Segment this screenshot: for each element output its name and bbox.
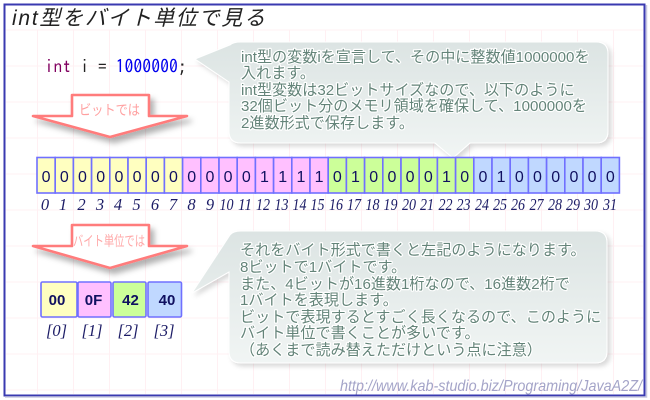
code line: int i = 1000000; [44, 58, 187, 76]
bit index numbers: 18 [366, 195, 380, 214]
bit index numbers: 14 [292, 195, 306, 214]
byte 2 bits [328, 158, 474, 193]
byte cells: 40 [159, 292, 175, 309]
byte cells: 0F [85, 292, 102, 309]
bit index numbers: 19 [384, 195, 398, 214]
bit index numbers: 30 [583, 195, 599, 214]
byte 3 bits: 0 [515, 169, 524, 186]
bit index numbers: 2 [77, 195, 86, 214]
bit index numbers: 9 [206, 195, 214, 214]
byte 1 bits: 0 [224, 169, 233, 186]
byte 2 bits: 0 [387, 169, 396, 186]
bit index numbers: 10 [220, 195, 234, 214]
bit index numbers [41, 195, 617, 214]
byte 0 bits [37, 158, 183, 193]
byte index labels: [0] [46, 321, 67, 340]
byte index labels: [3] [153, 321, 175, 340]
callout: declaration: 2進数形式で保存します。 [241, 115, 414, 132]
callout: declaration: 32個ビット分のメモリ領域を確保して、1000000を [241, 98, 587, 115]
byte 0 bits: 0 [133, 169, 142, 186]
byte 1 bits: 1 [278, 169, 287, 186]
callout: byte explanation: バイト単位で書くことが多いです。 [240, 324, 480, 342]
byte 3 bits: 0 [551, 169, 560, 186]
title: int型をバイト単位で見る [12, 7, 265, 30]
bit index numbers: 17 [347, 195, 362, 214]
callout: byte explanation: 8ビットで1バイトです。 [240, 259, 406, 276]
callout: byte explanation: （あくまで読み替えただけという点に注意） [240, 342, 542, 359]
byte 3 bits [474, 158, 619, 193]
bit index numbers: 16 [329, 195, 344, 214]
arrow: bits: ビットでは [79, 102, 140, 118]
byte 1 bits: 0 [205, 169, 214, 186]
bit index numbers: 21 [420, 195, 434, 214]
bit index numbers: 31 [602, 195, 617, 214]
bit index numbers: 3 [95, 195, 104, 214]
byte cells: 00 [49, 292, 65, 309]
byte cells [41, 282, 182, 317]
bit index numbers: 7 [169, 195, 178, 214]
bit index numbers: 23 [456, 195, 470, 214]
byte index labels: [2] [117, 321, 139, 340]
bit index numbers: 8 [187, 195, 196, 214]
byte 0 bits: 0 [42, 169, 51, 186]
byte index labels: [1] [81, 321, 103, 340]
callout: declaration [195, 42, 608, 158]
byte 3 bits: 0 [606, 169, 615, 186]
byte 2 bits: 0 [460, 169, 469, 186]
byte 0 bits: 0 [151, 169, 160, 186]
bit index numbers: 24 [475, 195, 489, 214]
byte index labels [46, 321, 175, 340]
bit index numbers: 0 [41, 195, 50, 214]
byte 0 bits: 0 [169, 169, 178, 186]
callout: byte explanation: それをバイト形式で書くと左記のようになります。 [240, 242, 586, 259]
bit index numbers: 1 [59, 195, 67, 214]
bit index numbers: 4 [114, 195, 122, 214]
bit index numbers: 20 [402, 195, 417, 214]
byte 2 bits: 0 [333, 169, 342, 186]
bit index numbers: 13 [274, 195, 288, 214]
bit index numbers: 28 [548, 195, 563, 214]
byte 0 bits: 0 [60, 169, 69, 186]
byte 0 bits: 0 [96, 169, 105, 186]
arrow: bytes: バイト単位では [73, 233, 145, 249]
byte 2 bits: 0 [369, 169, 378, 186]
byte 3 bits: 0 [569, 169, 578, 186]
bit index numbers: 15 [310, 195, 324, 214]
bit row [37, 158, 619, 193]
bit index numbers: 27 [530, 195, 544, 214]
byte 0 bits: 0 [114, 169, 123, 186]
byte 3 bits: 0 [588, 169, 597, 186]
byte 2 bits: 0 [424, 169, 433, 186]
callout: byte explanation: 1バイトを表現します。 [240, 292, 398, 309]
bit index numbers: 25 [493, 195, 507, 214]
bit index numbers: 12 [256, 195, 270, 214]
byte 3 bits: 0 [478, 169, 487, 186]
byte 1 bits: 0 [242, 169, 251, 186]
byte 2 bits: 0 [406, 169, 415, 186]
bit index numbers: 26 [511, 195, 526, 214]
arrow: bits [33, 95, 187, 137]
byte 1 bits: 1 [260, 169, 269, 186]
byte cells: 42 [122, 292, 139, 309]
byte 1 bits: 1 [315, 169, 324, 186]
byte 0 bits: 0 [78, 169, 87, 186]
bit index numbers: 5 [132, 195, 141, 214]
byte 1 bits [183, 158, 328, 193]
bit index numbers: 22 [438, 195, 452, 214]
byte 3 bits: 1 [497, 169, 506, 186]
byte 1 bits: 1 [296, 169, 305, 186]
arrow: bytes [33, 225, 187, 268]
bit index numbers: 29 [566, 195, 580, 214]
byte 2 bits: 1 [442, 169, 451, 186]
byte 1 bits: 0 [187, 169, 196, 186]
callout: declaration: 入れます。 [241, 65, 315, 82]
callout: declaration: int型変数は32ビットサイズなので、以下のように [241, 82, 575, 99]
byte 2 bits: 1 [351, 169, 360, 186]
bit index numbers: 6 [151, 195, 160, 214]
byte 3 bits: 0 [533, 169, 542, 186]
callout: byte explanation [192, 231, 607, 363]
callout: declaration: int型の変数iを宣言して、その中に整数値1000000を [241, 49, 590, 66]
callout: byte explanation: また、4ビットが16進数1桁なので、16進数2桁で [240, 276, 570, 293]
callout: byte explanation: ビットで表現するとすごく長くなるので、このように [240, 309, 601, 326]
bit index numbers: 11 [238, 195, 252, 214]
